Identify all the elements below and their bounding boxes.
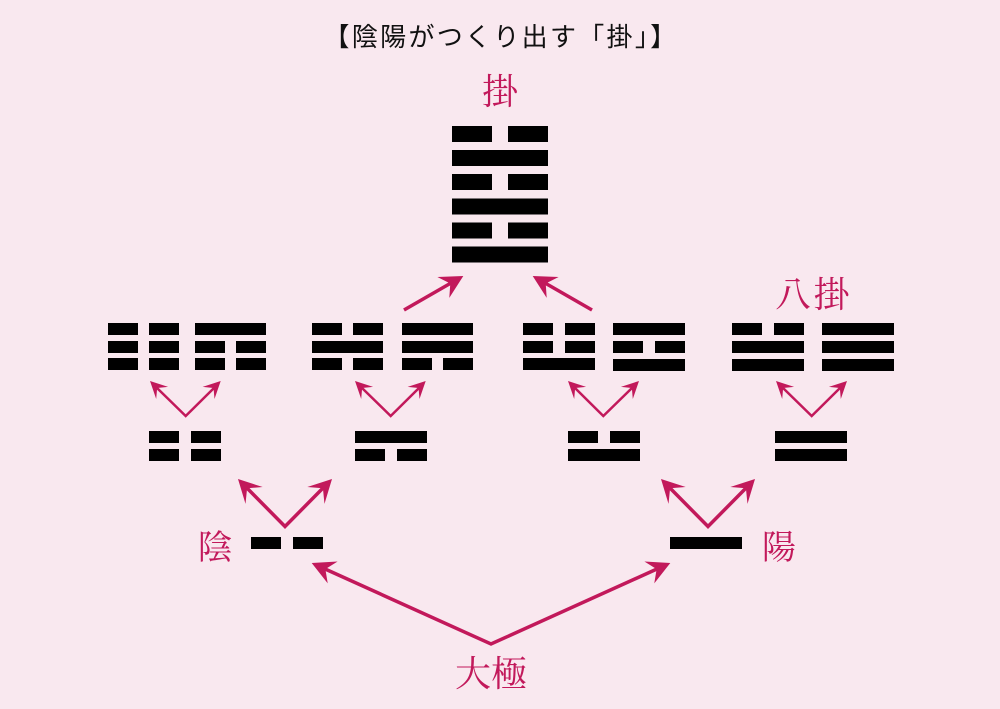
small arrows 2 [349,375,432,416]
trigrams group 4 [732,323,894,371]
label: 陽: 陽 [762,530,796,567]
yang line [670,537,742,549]
digram 3 [568,431,640,461]
small arrows 4 [770,375,853,416]
arrow: to hexagram from left [404,266,469,310]
hexagram [452,126,548,262]
trigrams group 3 [523,323,685,371]
arrows from yin [229,471,341,526]
label: 掛: 掛 [482,72,520,112]
arrows from taiji [307,552,675,644]
trigrams group 2 [312,323,473,370]
title: 【陰陽がつくり出す「掛」】 [324,22,678,52]
yin line [251,537,323,549]
digram 2 [355,431,427,461]
small arrows 3 [562,375,645,416]
arrow: to hexagram from right [527,266,592,310]
trigrams group 1 [108,323,266,370]
label: 陰: 陰 [198,529,232,567]
small arrows 1 [144,375,227,416]
label: 大極: 大極 [455,654,527,694]
digram 1 [149,431,221,461]
arrows from yang [652,471,764,526]
label: 八掛: 八掛 [775,275,852,315]
digram 4 [775,431,847,461]
